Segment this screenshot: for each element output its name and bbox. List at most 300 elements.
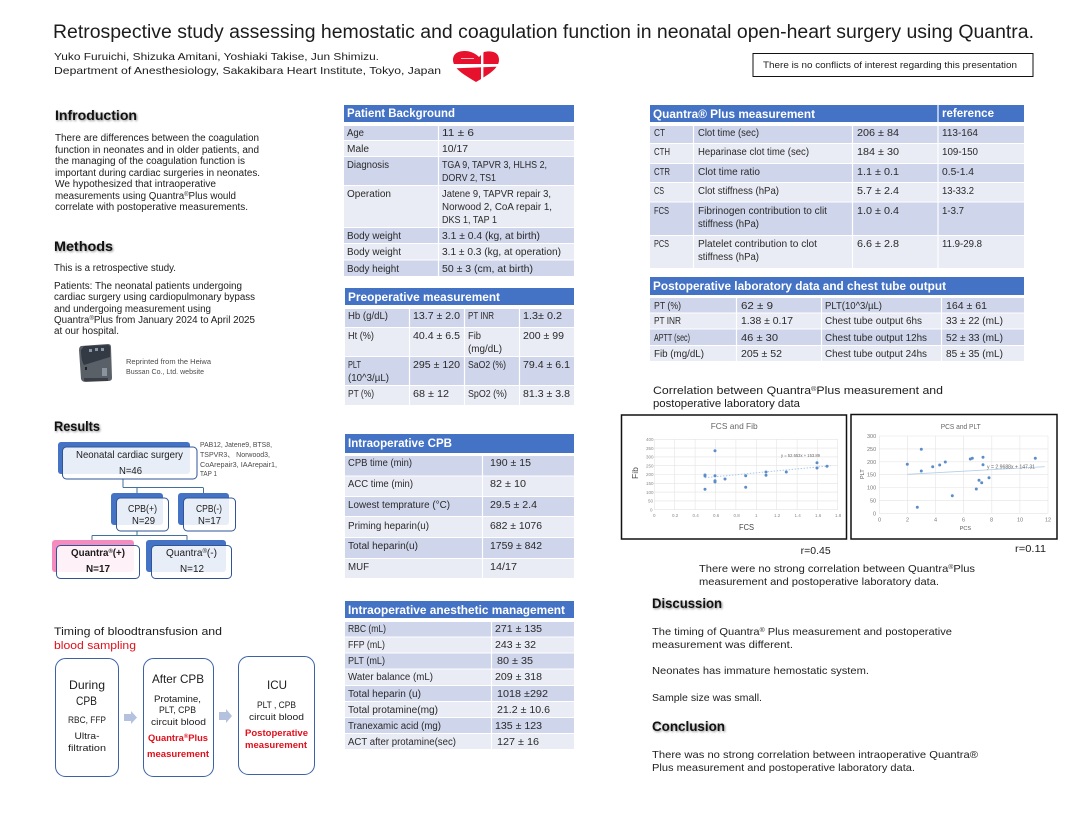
row: Hb and PT INR — [345, 309, 574, 327]
row: lowest temperature: 29.5 ± 2.4 — [490, 500, 537, 511]
text block: correlation finding: There were no strong correlation between Quantra — [699, 563, 934, 575]
text block: conclusion — [652, 749, 978, 774]
row: PLT and SaO2: SaO2 (%) — [468, 360, 506, 371]
timing box: during CPB: Ultra- — [74, 731, 100, 742]
row: PLT: PLT (mL) — [348, 656, 385, 667]
row: PLT: 80 ± 35 — [497, 656, 533, 667]
row: PCS: stiffness (hPa) — [698, 252, 759, 263]
row: diagnosis: Diagnosis — [347, 160, 389, 171]
image credit: Bussan Co., Ltd. website — [126, 367, 204, 376]
row: Ht and Fib — [345, 328, 574, 356]
timing box: during CPB: CPB — [76, 694, 97, 708]
timing box: after CPB: measurement — [147, 749, 210, 760]
row: body weight at birth — [344, 228, 574, 243]
row: PT INR and chest tube 6hs: 1.38 ± 0.17 — [741, 316, 793, 327]
row: diagnosis — [344, 157, 574, 185]
row: PLT and SaO2: PLT — [348, 360, 361, 371]
row: RBC — [345, 622, 574, 636]
row: Ht and Fib: 200 ± 99 — [523, 331, 564, 342]
row: PT and PLT — [650, 298, 1024, 312]
flow box: Quantra negative: N=12 — [180, 563, 204, 575]
timing box: during CPB: During — [69, 678, 105, 692]
table header: Quantra® Plus measurement — [653, 107, 815, 121]
row: Hb and PT INR: Hb (g/dL) — [348, 311, 388, 322]
row: PCS: 6.6 ± 2.8 — [857, 239, 899, 250]
flow diagram: patient selection — [52, 442, 236, 578]
timing box: ICU — [238, 656, 314, 774]
row: body weight at operation: Body weight — [347, 247, 401, 258]
flow box: Quantra positive — [52, 540, 140, 578]
row: total protamine — [345, 702, 574, 717]
timing box: during CPB: filtration — [68, 743, 106, 754]
row: Fib and chest tube 24hs: Fib (mg/dL) — [654, 349, 704, 360]
icon: heart institute logo — [450, 49, 502, 84]
row: Fib and chest tube 24hs: 85 ± 35 (mL) — [946, 349, 1003, 360]
row: operation: Operation — [347, 189, 391, 200]
scatter chart: FCS and Fib: 0.8 — [734, 513, 740, 518]
row: ACC time: ACC time (min) — [348, 479, 413, 490]
scatter chart: FCS and Fib: 300 — [646, 455, 654, 460]
arrow: after CPB to ICU — [219, 709, 232, 723]
row: PT and PLT: PLT(10^3/µL) — [825, 301, 882, 312]
scatter chart: FCS and Fib: 400 — [646, 437, 654, 442]
row: CT: CT — [654, 128, 665, 139]
table: Quantra Plus measurement — [650, 105, 1024, 268]
text block: methods: and undergoing measurement using — [54, 304, 211, 315]
row: total heparin — [345, 538, 574, 558]
row: tranexamic acid — [345, 718, 574, 733]
row: body weight at birth: 3.1 ± 0.4 (kg, at birth) — [442, 231, 540, 242]
text block: discussion: Neonates has immature hemostatic system. — [652, 665, 869, 677]
row: CT: Clot time (sec) — [698, 128, 759, 139]
row: total protamine: Total protamine(mg) — [348, 705, 438, 716]
row: PT and SpO2 — [345, 386, 574, 405]
flow box: CPB negative: N=17 — [198, 515, 221, 527]
row: body height: 50 ± 3 (cm, at birth) — [442, 264, 533, 275]
row: body height — [344, 260, 574, 276]
row: PLT and SaO2: 79.4 ± 6.1 — [523, 360, 570, 371]
flow box: CPB negative: CPB(-) — [196, 503, 222, 515]
row: CPB time — [345, 456, 574, 476]
row: FCS: 1.0 ± 0.4 — [857, 206, 899, 217]
scatter chart: FCS and Fib: 0 — [653, 513, 656, 518]
text block: discussion: ® — [760, 626, 765, 634]
row: ACT after protamine: 127 ± 16 — [497, 737, 539, 748]
scatter chart: FCS and Fib: Fib — [630, 467, 640, 479]
row: FFP: 243 ± 32 — [495, 640, 536, 651]
row: ACT after protamine: ACT after protamine(sec) — [348, 737, 456, 748]
text block: introduction: Plus would — [189, 191, 236, 202]
row: Hb and PT INR: 13.7 ± 2.0 — [413, 311, 460, 322]
scatter chart: FCS and Fib: 200 — [646, 472, 654, 477]
row: PCS: PCS — [654, 239, 669, 250]
text block: discussion: measurement was different. — [652, 639, 793, 651]
row: CTR — [650, 164, 1024, 182]
row: ACT after protamine — [345, 734, 574, 749]
row: ACC time: 82 ± 10 — [490, 479, 526, 490]
text block: methods: ® — [90, 315, 94, 322]
scatter chart: FCS and Fib: 0.6 — [713, 513, 720, 518]
row: PCS: 11.9-29.8 — [942, 239, 982, 250]
row: body weight at operation — [344, 244, 574, 260]
title: Retrospective study assessing hemostatic and coagulation function in neonatal open-heart surgery using Quantra. — [53, 22, 1034, 43]
table header: Preoperative measurement — [348, 290, 500, 304]
scatter chart: PCS and PLT: 250 — [867, 447, 876, 453]
scatter chart: FCS and Fib — [622, 415, 846, 539]
heading: Discussion: Discussion — [652, 595, 722, 611]
row: CTH: CTH — [654, 147, 670, 158]
row: MUF: MUF — [348, 562, 369, 573]
table header: Intraoperative anesthetic management — [348, 603, 565, 617]
text block: conclusion: There was no strong correlation between intraoperative Quantra® — [652, 749, 978, 761]
row: body height: Body height — [347, 264, 399, 275]
row: CTH: 184 ± 30 — [857, 147, 899, 158]
row: lowest temperature: Lowest temprature (°C) — [348, 500, 450, 511]
row: Ht and Fib: 40.4 ± 6.5 — [413, 331, 460, 342]
scatter chart: FCS and Fib: FCS — [739, 522, 754, 532]
row: MUF: 14/17 — [490, 562, 517, 573]
scatter chart: FCS and Fib: 1.8 — [835, 513, 842, 518]
timing box: ICU: measurement — [245, 740, 308, 751]
scatter chart: FCS and Fib: 100 — [646, 490, 654, 495]
row: PLT and SaO2: 295 ± 120 — [413, 360, 460, 371]
text block: introduction: function in neonates and in older patients, and — [55, 145, 259, 156]
table header — [345, 434, 574, 453]
correlation value: r=0.11: r=0.11 — [1015, 544, 1046, 555]
row: FFP — [345, 638, 574, 652]
row: tranexamic acid: 135 ± 123 — [495, 721, 542, 732]
table: postoperative laboratory data and chest tube output — [650, 277, 1024, 361]
row: RBC: 271 ± 135 — [495, 624, 542, 635]
row: water balance — [345, 670, 574, 685]
scatter chart: PCS and PLT: y = 2.9688x + 147.31 — [987, 465, 1035, 471]
timing box: after CPB: ® — [184, 733, 189, 740]
row: age: 11 ± 6 — [442, 128, 475, 139]
row: APTT and chest tube 12hs: 46 ± 30 — [741, 333, 778, 344]
text block: methods: Quantra — [54, 315, 90, 326]
scatter chart: FCS and Fib: 0.2 — [672, 513, 679, 518]
flow box: CPB positive — [111, 493, 168, 531]
row: total heparin — [345, 686, 574, 701]
text block: correlation finding: ® — [948, 563, 954, 571]
table header — [650, 105, 1024, 122]
text block: correlation finding: measurement and postoperative laboratory data. — [699, 576, 939, 588]
row: operation — [344, 186, 574, 227]
flow box: CPB positive: CPB(+) — [128, 503, 157, 515]
note: operations list — [200, 440, 277, 478]
table: preoperative measurement — [345, 288, 574, 405]
authors and affiliation — [54, 51, 441, 77]
flow box: Quantra positive: N=17 — [86, 563, 110, 575]
row: CS: CS — [654, 186, 664, 197]
text block: correlation finding: Plus — [953, 563, 975, 575]
row: CTR: 0.5-1.4 — [942, 167, 974, 178]
scatter chart: PCS and PLT: 8 — [990, 518, 993, 524]
row: PT and SpO2: PT (%) — [348, 389, 374, 400]
scatter chart: FCS and Fib: 1.4 — [794, 513, 801, 518]
row: CS: 13-33.2 — [942, 186, 974, 197]
row: PT and PLT: PT (%) — [654, 301, 681, 312]
row: FCS: FCS — [654, 206, 669, 217]
table: intraoperative CPB — [345, 434, 574, 578]
row: Hb and PT INR: 1.3± 0.2 — [523, 311, 562, 322]
row: RBC: RBC (mL) — [348, 624, 386, 635]
row: FFP: FFP (mL) — [348, 640, 385, 651]
row: CTR: Clot time ratio — [698, 167, 760, 178]
flow box: Quantra positive: ® — [108, 548, 113, 555]
scatter chart: FCS and Fib: 1.6 — [815, 513, 822, 518]
scatter chart: PCS and PLT: 100 — [867, 486, 876, 492]
row: CTR: 1.1 ± 0.1 — [857, 167, 899, 178]
row: priming heparin — [345, 517, 574, 537]
flow box: Quantra negative: (-) — [207, 548, 217, 559]
heading: correlation charts: postoperative laboratory data — [653, 398, 801, 410]
heading: Results: Results — [54, 418, 100, 434]
timing box: ICU: PLT , CPB — [257, 700, 296, 711]
timing box: ICU: circuit blood — [249, 712, 304, 723]
flow box: neonatal cardiac surgery: N=46 — [119, 465, 142, 477]
arrow: during CPB to after CPB — [124, 711, 137, 724]
heading: timing of blood transfusion and sampling: blood sampling — [54, 640, 136, 652]
text block: discussion — [652, 626, 952, 704]
text block: introduction: important during cardiac surgeries in neonates. — [55, 168, 260, 179]
row: PT and SpO2: SpO2 (%) — [468, 389, 507, 400]
scatter chart: PCS and PLT: PCS and PLT — [941, 422, 981, 431]
heading: timing of blood transfusion and sampling — [54, 626, 222, 652]
conflict of interest box: There is no conflicts of interest regarding this presentation — [763, 60, 1017, 71]
row: CPB time: CPB time (min) — [348, 458, 412, 469]
text block: introduction: There are differences between the coagulation — [55, 133, 259, 144]
timing box: during CPB — [56, 658, 118, 776]
text block: introduction: measurements using Quantra — [55, 191, 187, 202]
scatter chart: PCS and PLT: 12 — [1045, 518, 1051, 524]
text block: methods: Plus from January 2024 to April 2025 — [94, 315, 255, 326]
table header: Patient Background — [347, 106, 455, 120]
row: MUF — [345, 559, 574, 578]
text block: introduction — [55, 133, 260, 213]
heading: correlation charts: Correlation between Quantra — [653, 385, 794, 397]
scatter chart: PCS and PLT: 2 — [906, 518, 909, 524]
table header — [650, 277, 1024, 295]
scatter chart: FCS and Fib: 250 — [646, 463, 654, 468]
row: priming heparin: 682 ± 1076 — [490, 521, 542, 532]
row: CTH: Heparinase clot time (sec) — [698, 147, 809, 158]
flow box: neonatal cardiac surgery: Neonatal cardiac surgery — [76, 449, 184, 461]
authors and affiliation: Department of Anesthesiology, Sakakibara Heart Institute, Tokyo, Japan — [54, 65, 441, 77]
scatter chart: PCS and PLT: 200 — [867, 460, 876, 466]
row: PCS: Platelet contribution to clot — [698, 239, 817, 250]
scatter chart: PCS and PLT: 0 — [873, 511, 876, 517]
row: CS — [650, 183, 1024, 202]
text block: methods: cardiac surgery using cardiopulmonary bypass — [54, 292, 255, 303]
text block: correlation finding — [699, 563, 975, 588]
heading: Methods: Methods — [54, 238, 113, 254]
row: male: Male — [347, 144, 369, 155]
scatter chart: FCS and Fib: y = 52.653x + 153.89 — [781, 453, 820, 458]
icon: Quantra device photo — [79, 344, 112, 382]
text block: conclusion: Plus measurement and postoperative laboratory data. — [652, 762, 915, 774]
row: lowest temperature — [345, 497, 574, 516]
flow box: neonatal cardiac surgery — [58, 442, 197, 479]
row: body weight at birth: Body weight — [347, 231, 401, 242]
text block: discussion: The timing of Quantra — [652, 626, 754, 638]
image credit — [126, 357, 212, 376]
timing box: during CPB: RBC, FFP — [68, 715, 106, 726]
row: PT INR and chest tube 6hs: PT INR — [654, 316, 681, 327]
row: Hb and PT INR: PT INR — [468, 311, 494, 322]
row: Ht and Fib: (mg/dL) — [468, 344, 502, 355]
flow box: Quantra negative — [146, 540, 232, 578]
table: patient background — [344, 105, 574, 276]
note: operations list: PAB12, Jatene9, BTS8, — [200, 440, 272, 449]
row: body weight at operation: 3.1 ± 0.3 (kg, at operation) — [442, 247, 561, 258]
flow box: CPB positive: N=29 — [132, 515, 155, 527]
row: total heparin: 1018 ±292 — [497, 689, 548, 700]
row: FCS: Fibrinogen contribution to clit — [698, 206, 827, 217]
heading: correlation charts — [653, 385, 943, 410]
row: APTT and chest tube 12hs: APTT (sec) — [654, 333, 690, 344]
row: APTT and chest tube 12hs: Chest tube output 12hs — [825, 333, 927, 344]
row: CPB time: 190 ± 15 — [490, 458, 531, 469]
row: ACC time — [345, 476, 574, 496]
row: PLT and SaO2 — [345, 357, 574, 385]
row: Fib and chest tube 24hs: Chest tube output 24hs — [825, 349, 927, 360]
flow box: Quantra negative: Quantra — [166, 548, 202, 559]
row: operation: Jatene 9, TAPVR repair 3, — [442, 189, 551, 200]
flow box: CPB negative — [178, 493, 236, 531]
text block: introduction: correlate with postoperative measurements. — [55, 202, 248, 213]
row: CT: 206 ± 84 — [857, 128, 899, 139]
text block: introduction: ® — [184, 191, 189, 198]
heading: Conclusion: Conclusion — [652, 718, 725, 734]
scatter chart: PCS and PLT: PCS — [960, 526, 971, 532]
text block: introduction: We hypothesized that intraoperative — [55, 179, 216, 190]
row: male: 10/17 — [442, 144, 468, 155]
row: PT and SpO2: 68 ± 12 — [413, 389, 449, 400]
heading: correlation charts: ® — [811, 385, 817, 393]
row: total heparin: Total heparin(u) — [348, 541, 418, 552]
row: Ht and Fib: Ht (%) — [348, 331, 374, 342]
scatter chart: PCS and PLT: 4 — [934, 518, 937, 524]
heading: timing of blood transfusion and sampling: Timing of bloodtransfusion and — [54, 626, 222, 638]
row: CT — [650, 126, 1024, 143]
row: operation: DKS 1, TAP 1 — [442, 215, 497, 226]
row: PT INR and chest tube 6hs: 33 ± 22 (mL) — [946, 316, 1003, 327]
image credit: Reprinted from the Heiwa — [126, 357, 212, 366]
row: water balance: 209 ± 318 — [495, 672, 542, 683]
row: CS: 5.7 ± 2.4 — [857, 186, 899, 197]
row: CS: Clot stiffness (hPa) — [698, 186, 779, 197]
row: operation: Norwood 2, CoA repair 1, — [442, 202, 552, 213]
heading: Introduction: Infroduction — [55, 107, 137, 123]
table header — [344, 105, 574, 122]
table: intraoperative anesthetic management — [345, 601, 574, 749]
authors and affiliation: Yuko Furuichi, Shizuka Amitani, Yoshiaki Takise, Jun Shimizu. — [54, 51, 379, 63]
scatter chart: PCS and PLT: 10 — [1017, 518, 1023, 524]
row: age — [344, 126, 574, 140]
scatter chart: FCS and Fib: 1 — [755, 513, 758, 518]
row: water balance: Water balance (mL) — [348, 672, 433, 683]
row: Fib and chest tube 24hs — [650, 346, 1024, 361]
row: age: Age — [347, 128, 364, 139]
timing box: after CPB: After CPB — [152, 672, 204, 686]
row: Ht and Fib: Fib — [468, 331, 481, 342]
row: diagnosis: DORV 2, TS1 — [442, 173, 496, 184]
row: total heparin: 1759 ± 842 — [490, 541, 542, 552]
timing box: ICU: ICU — [267, 678, 287, 692]
row: total heparin: Total heparin (u) — [348, 689, 421, 700]
scatter chart: FCS and Fib: 350 — [646, 446, 654, 451]
scatter chart: PCS and PLT: 0 — [878, 518, 881, 524]
row: APTT and chest tube 12hs — [650, 330, 1024, 345]
table header: Intraoperative CPB — [348, 436, 452, 450]
row: PT and PLT: 62 ± 9 — [741, 301, 774, 312]
timing box: after CPB: Quantra — [148, 733, 184, 744]
row: PT INR and chest tube 6hs: Chest tube output 6hs — [825, 316, 922, 327]
scatter chart: FCS and Fib: 50 — [648, 499, 654, 504]
row: total protamine: 21.2 ± 10.6 — [497, 705, 550, 716]
text block: introduction: the managing of the coagulation function is — [55, 156, 245, 167]
text block: methods: at our hospital. — [54, 326, 119, 337]
row: PLT and SaO2: (10^3/µL) — [348, 373, 389, 384]
row: priming heparin: Priming heparin(u) — [348, 521, 429, 532]
table header: Postoperative laboratory data and chest tube output — [653, 279, 946, 293]
scatter chart: FCS and Fib: FCS and Fib — [711, 421, 758, 431]
scatter chart: PCS and PLT: 6 — [962, 518, 965, 524]
row: APTT and chest tube 12hs: 52 ± 33 (mL) — [946, 333, 1003, 344]
scatter chart: PCS and PLT: PLT — [860, 469, 866, 479]
note: operations list: CoArepair3, IAArepair1, — [200, 460, 277, 469]
flow box: Quantra negative: ® — [202, 548, 207, 555]
timing box: after CPB: circuit blood — [151, 717, 206, 728]
row: CT: 113-164 — [942, 128, 978, 139]
conflict of interest box — [753, 54, 1033, 76]
correlation value: r=0.45: r=0.45 — [801, 546, 831, 557]
row: CTH — [650, 144, 1024, 163]
row: FCS — [650, 202, 1024, 235]
scatter chart: FCS and Fib: 0 — [650, 507, 653, 512]
scatter chart: PCS and PLT: 300 — [867, 434, 876, 440]
flow box: Quantra positive: Quantra — [71, 548, 109, 559]
text block: discussion: Sample size was small. — [652, 692, 762, 704]
text block: methods: Patients: The neonatal patients undergoing — [54, 281, 242, 292]
row: PT and SpO2: 81.3 ± 3.8 — [523, 389, 570, 400]
row: PT and PLT: 164 ± 61 — [946, 301, 987, 312]
row: tranexamic acid: Tranexamic acid (mg) — [348, 721, 441, 732]
row: male — [344, 141, 574, 156]
table header — [345, 288, 574, 305]
row: CTH: 109-150 — [942, 147, 978, 158]
table header: reference — [942, 106, 994, 120]
scatter chart: FCS and Fib: 1.2 — [774, 513, 781, 518]
scatter chart: FCS and Fib: 150 — [646, 481, 654, 486]
flow box: Quantra positive: (+) — [113, 548, 125, 559]
timing box: ICU: Postoperative — [245, 728, 308, 739]
scatter chart: FCS and Fib: 0.4 — [692, 513, 699, 518]
row: PLT — [345, 654, 574, 668]
note: operations list: TAP 1 — [200, 469, 217, 478]
row: FCS: 1-3.7 — [942, 206, 964, 217]
text block: discussion: Plus measurement and postoperative — [765, 626, 952, 638]
timing box: after CPB: Protamine, — [154, 694, 201, 705]
row: CTR: CTR — [654, 167, 670, 178]
timing box: after CPB — [144, 658, 214, 776]
row: PCS — [650, 236, 1024, 268]
row: diagnosis: TGA 9, TAPVR 3, HLHS 2, — [442, 160, 547, 171]
text block: methods: This is a retrospective study. — [54, 263, 176, 274]
row: PT INR and chest tube 6hs — [650, 314, 1024, 328]
timing box: after CPB: Plus — [188, 733, 208, 744]
